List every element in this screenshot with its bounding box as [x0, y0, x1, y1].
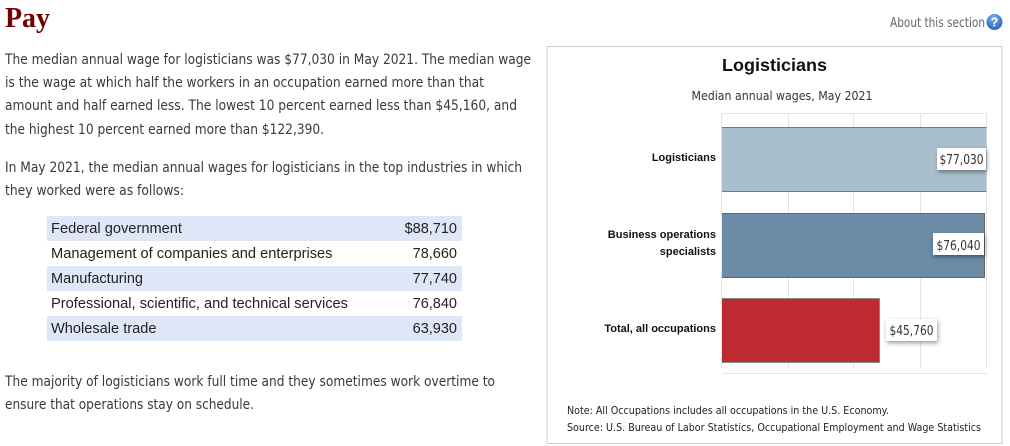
table: wages by industry: Professional, scientific, and technical services [51, 296, 348, 312]
text block: work schedule: The majority of logisticians work full time and they sometimes work overtime to [4, 374, 495, 390]
chart note and source [567, 404, 981, 434]
bar chart [604, 113, 987, 374]
bar: business operations specialists: $76,040 [936, 239, 980, 254]
text block: median wage intro: amount and half earned less. The lowest 10 percent earned less than $45,160, and [5, 98, 517, 114]
text block: median wage intro: The median annual wage for logisticians was $77,030 in May 2021. The median wage [4, 52, 531, 68]
text block: top industries intro: they worked were as follows: [5, 183, 184, 199]
table: wages by industry: Management of companies and enterprises [51, 246, 332, 262]
panel: logisticians chart [547, 46, 1002, 444]
text block: work schedule: ensure that operations stay on schedule. [5, 397, 254, 413]
table: wages by industry: Wholesale trade [51, 321, 156, 337]
bar: logisticians: $77,030 [940, 153, 984, 168]
chart subtitle: Median annual wages, May 2021 [692, 89, 872, 103]
bar: total all occupations: Total, all occupations [604, 323, 716, 335]
chart title: Logisticians [722, 55, 827, 75]
title: Pay [5, 3, 50, 34]
text block: work schedule [4, 374, 495, 413]
text block: top industries intro [5, 160, 522, 199]
table: wages by industry: 63,930 [413, 321, 457, 337]
table: wages by industry: 76,840 [413, 296, 457, 312]
chart note and source: Note: All Occupations includes all occupations in the U.S. Economy. [567, 404, 889, 417]
text block: median wage intro: the highest 10 percent earned more than $122,390. [5, 122, 324, 138]
bar: business operations specialists [608, 213, 984, 278]
text block: median wage intro [4, 52, 531, 138]
table: wages by industry: $88,710 [405, 221, 457, 237]
bar: total all occupations [604, 298, 937, 363]
bar: total all occupations: $45,760 [890, 324, 934, 339]
table: wages by industry: 78,660 [413, 246, 457, 262]
text block: median wage intro: is the wage at which half the workers in an occupation earned more than that [5, 75, 484, 91]
table: wages by industry: Federal government [51, 221, 182, 237]
text block: top industries intro: In May 2021, the median annual wages for logisticians in the top industries in which [5, 160, 522, 176]
bar: logisticians [652, 127, 986, 192]
bar: business operations specialists: Business operations [608, 229, 716, 241]
icon: help question mark: ? [991, 16, 998, 30]
bar: logisticians: Logisticians [652, 152, 716, 164]
table: wages by industry [47, 216, 462, 341]
about this section link: About this section [890, 16, 985, 31]
bar: business operations specialists: specialists [660, 246, 716, 258]
table: wages by industry: 77,740 [413, 271, 457, 287]
table: wages by industry: Manufacturing [51, 271, 143, 287]
